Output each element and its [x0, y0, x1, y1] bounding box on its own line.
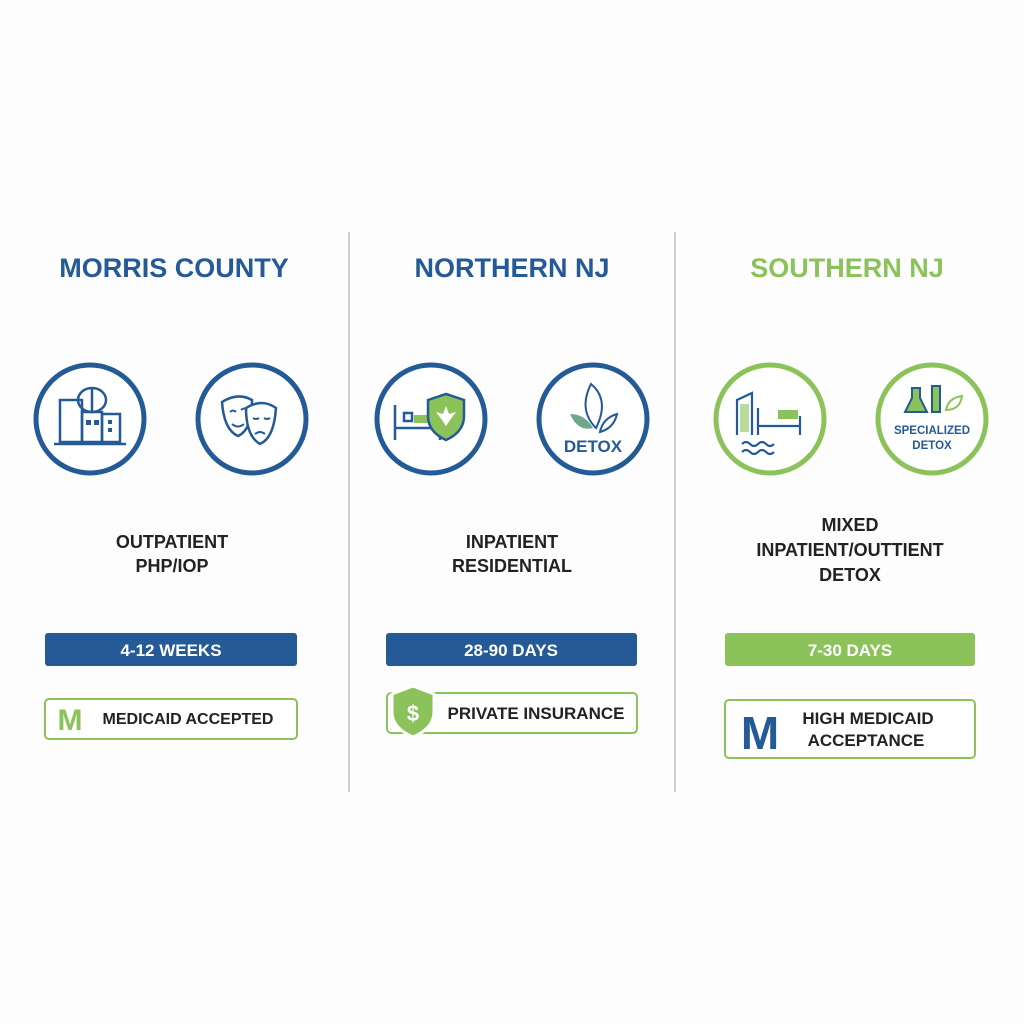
- badge: private insurance: $: [407, 701, 419, 726]
- icon: specialized detox flasks: DETOX: [912, 440, 952, 452]
- badge: private insurance: [387, 686, 637, 737]
- text: mixed: INPATIENT/OUTTIENT: [756, 540, 944, 560]
- icon: detox leaves: [539, 365, 647, 473]
- bar: 7-30 days: 7-30 DAYS: [808, 641, 892, 660]
- text: mixed: DETOX: [819, 565, 881, 585]
- bar: 28-90 days: 28-90 DAYS: [464, 641, 558, 660]
- icon: building bed water: [716, 365, 824, 473]
- text: outpatient: PHP/IOP: [135, 556, 209, 576]
- badge: private insurance: PRIVATE INSURANCE: [448, 704, 624, 723]
- icon: detox leaves: DETOX: [564, 437, 623, 456]
- heading: Southern NJ: SOUTHERN NJ: [750, 253, 944, 283]
- badge: high medicaid acceptance: M: [741, 707, 779, 759]
- text: mixed: MIXED: [821, 515, 879, 535]
- badge: high medicaid acceptance: [725, 700, 975, 759]
- bar: 4-12 weeks: 4-12 WEEKS: [120, 641, 222, 660]
- icon: bed with shield: [377, 365, 485, 473]
- heading: Morris County: MORRIS COUNTY: [59, 253, 289, 283]
- badge: medicaid accepted: MEDICAID ACCEPTED: [103, 711, 273, 728]
- badge: medicaid accepted: [45, 699, 297, 739]
- text: inpatient: RESIDENTIAL: [452, 556, 572, 576]
- icon: theater masks: [198, 365, 306, 473]
- icon: building with brain: [36, 365, 144, 473]
- badge: high medicaid acceptance: ACCEPTANCE: [808, 731, 924, 750]
- text: inpatient: INPATIENT: [466, 532, 558, 552]
- bar: 7-30 days: [725, 633, 975, 666]
- icon: specialized detox flasks: [878, 365, 986, 473]
- badge: medicaid accepted: M: [58, 704, 82, 737]
- badge: high medicaid acceptance: HIGH MEDICAID: [802, 709, 934, 728]
- heading: Northern NJ: NORTHERN NJ: [414, 253, 610, 283]
- text: outpatient: OUTPATIENT: [116, 532, 228, 552]
- bar: 28-90 days: [386, 633, 637, 666]
- icon: specialized detox flasks: SPECIALIZED: [894, 425, 970, 437]
- bar: 4-12 weeks: [45, 633, 297, 666]
